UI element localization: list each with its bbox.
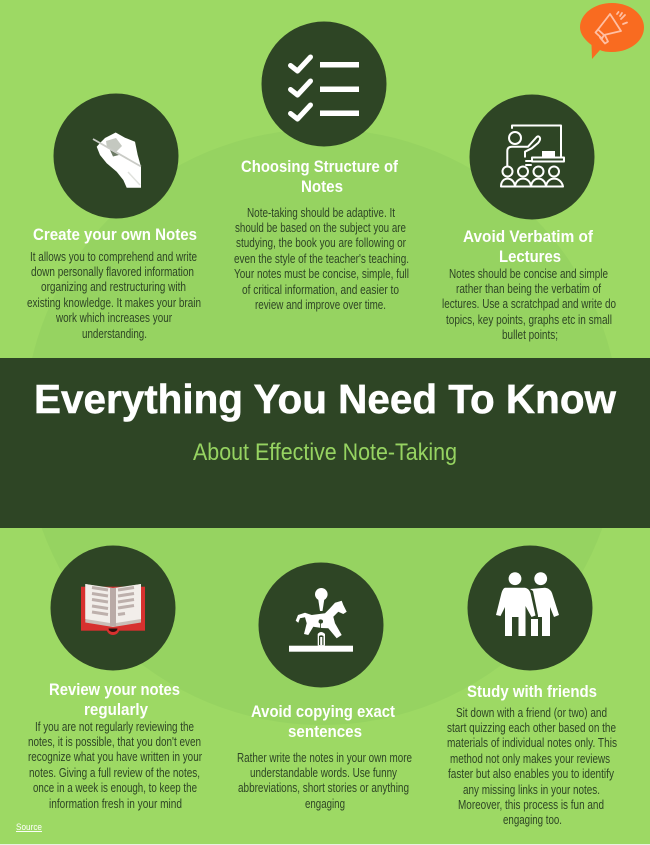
heading: Choosing Structure of [241, 158, 398, 176]
body text [442, 267, 616, 342]
heading [241, 158, 398, 196]
panel: avoid verbatim of lectures [442, 94, 616, 342]
body text: engaging too. [503, 813, 562, 827]
body text: information fresh in your mind [49, 797, 182, 811]
panel: avoid copying exact sentences [237, 562, 412, 811]
body text: Moreover, this process is fun and [458, 798, 604, 812]
body text: recognize what you have written in your [28, 750, 202, 764]
icon: teacher and class [470, 94, 594, 220]
heading: sentences [288, 723, 362, 741]
body text: engaging [305, 797, 345, 811]
body text: faster but also enables you to identify [448, 767, 615, 781]
body text: Note-taking should be adaptive. It [247, 206, 395, 220]
heading: Create your own Notes [33, 226, 197, 244]
body text [27, 250, 201, 341]
body text: rather than being the verbatim of [456, 282, 601, 296]
body text: understanding. [82, 327, 147, 341]
body text: understandable words. Use funny [250, 766, 398, 780]
source link: Source [16, 822, 42, 833]
body text: It allows you to comprehend and write [30, 250, 197, 264]
body text: review and improve over time. [255, 298, 386, 312]
heading: Review your notes [49, 681, 180, 699]
panel: study with friends [447, 546, 617, 827]
heading: Avoid copying exact [251, 703, 395, 721]
body text: Notes should be concise and simple [449, 267, 608, 281]
heading: Avoid Verbatim of [463, 228, 593, 246]
icon: two friends [468, 546, 592, 670]
body text: bullet points; [502, 328, 558, 342]
body text: of critical information, and easier to [242, 283, 399, 297]
icon: checklist [262, 22, 386, 146]
icon: hand writing [54, 94, 178, 218]
body text: topics, key points, graphs etc in small [446, 313, 612, 327]
title banner [0, 358, 650, 528]
heading: Study with friends [467, 683, 597, 701]
panel: review your notes regularly [28, 546, 202, 811]
title: Everything You Need To Know [34, 376, 616, 422]
body text: Your notes must be concise, simple, full [234, 267, 409, 281]
body text: studying, the book you are following or [236, 236, 406, 250]
body text: down personally flavored information [31, 265, 194, 279]
body text [447, 706, 617, 827]
body text: method not only makes your reviews [450, 752, 610, 766]
heading: Notes [301, 178, 343, 196]
body text: Rather write the notes in your own more [237, 751, 412, 765]
body text: If you are not regularly reviewing the [35, 720, 194, 734]
body text: notes, it is possible, that you don't even [28, 735, 201, 749]
subtitle: About Effective Note-Taking [193, 439, 457, 466]
body text: notes. Giving a full review of the notes, [29, 766, 200, 780]
body text: Sit down with a friend (or two) and [456, 706, 607, 720]
icon: orange speech bubble with megaphone [580, 3, 644, 59]
body text: work which increases your [55, 311, 172, 325]
body text: once in a week is enough, to keep the [33, 781, 197, 795]
body text: abbreviations, short stories or anything [238, 781, 409, 795]
icon: open book [50, 546, 176, 670]
icon: rocking horse [258, 562, 384, 688]
body text [234, 206, 409, 312]
heading [49, 681, 180, 719]
body text [237, 751, 412, 811]
body text: should be based on the subject you are [235, 221, 406, 235]
body text [28, 720, 202, 811]
panel: create your own notes [27, 94, 201, 341]
body text: organizing and restructuring with [41, 280, 186, 294]
body text: even the style of the teacher's teaching. [234, 252, 409, 266]
heading: regularly [84, 701, 149, 719]
body text: any missing links in your notes. [463, 783, 600, 797]
heading [463, 228, 593, 266]
heading [251, 703, 395, 741]
heading: Lectures [499, 248, 561, 266]
body text: existing knowledge. It makes your brain [27, 296, 201, 310]
panel: choosing structure of notes [234, 22, 409, 312]
